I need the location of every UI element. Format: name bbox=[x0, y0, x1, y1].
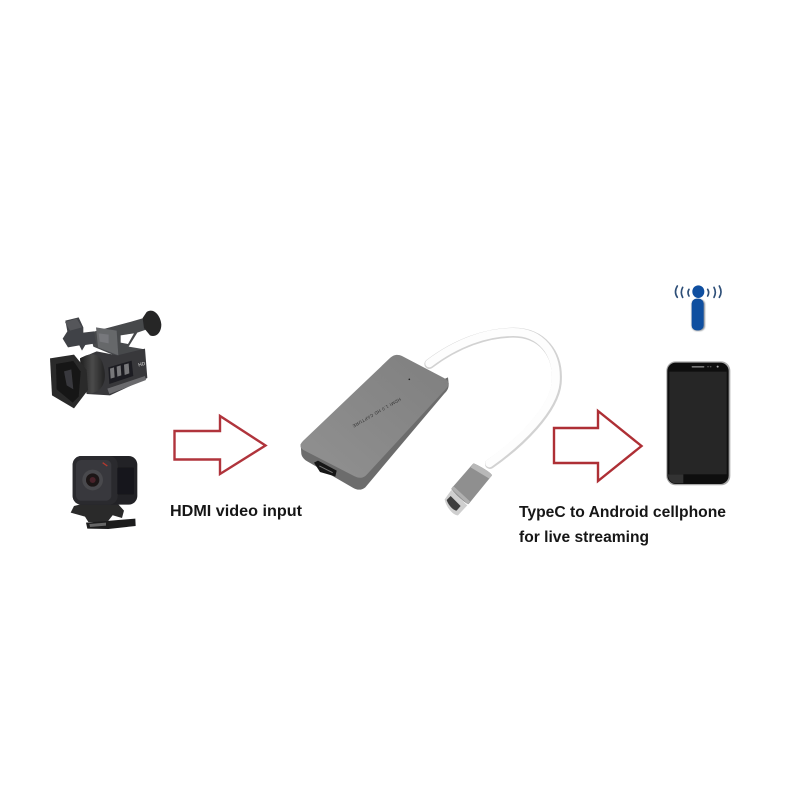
LED bbox=[408, 378, 410, 380]
device top face bbox=[300, 355, 449, 478]
label: for live streaming: for live streaming bbox=[519, 529, 649, 546]
icon: smartphone bbox=[666, 361, 730, 485]
flip screen bbox=[96, 327, 118, 355]
camera mount bbox=[71, 503, 124, 522]
HDMI port bbox=[314, 461, 337, 477]
arrow: TypeC output bbox=[554, 411, 642, 481]
icon: wireless broadcast bbox=[675, 285, 721, 331]
USB-C plug bbox=[445, 463, 492, 515]
icon: video camcorder bbox=[50, 311, 161, 408]
microphone mount bbox=[63, 317, 96, 351]
handle bbox=[90, 316, 153, 357]
label: TypeC to Android cellphone: TypeC to Android cellphone bbox=[519, 504, 726, 521]
arrow: HDMI input bbox=[174, 416, 266, 474]
USB-C cable bbox=[429, 333, 557, 464]
device side bbox=[301, 377, 449, 490]
device label: HDMI 1.0 HD CAPTURE bbox=[352, 397, 402, 429]
icon: video camcorder: HD bbox=[138, 361, 147, 369]
eyecup bbox=[143, 311, 161, 336]
capture device and cable bbox=[300, 332, 557, 515]
label: HDMI video input: HDMI video input bbox=[170, 503, 303, 520]
body bbox=[80, 349, 147, 395]
icon: action camera bbox=[71, 456, 137, 529]
